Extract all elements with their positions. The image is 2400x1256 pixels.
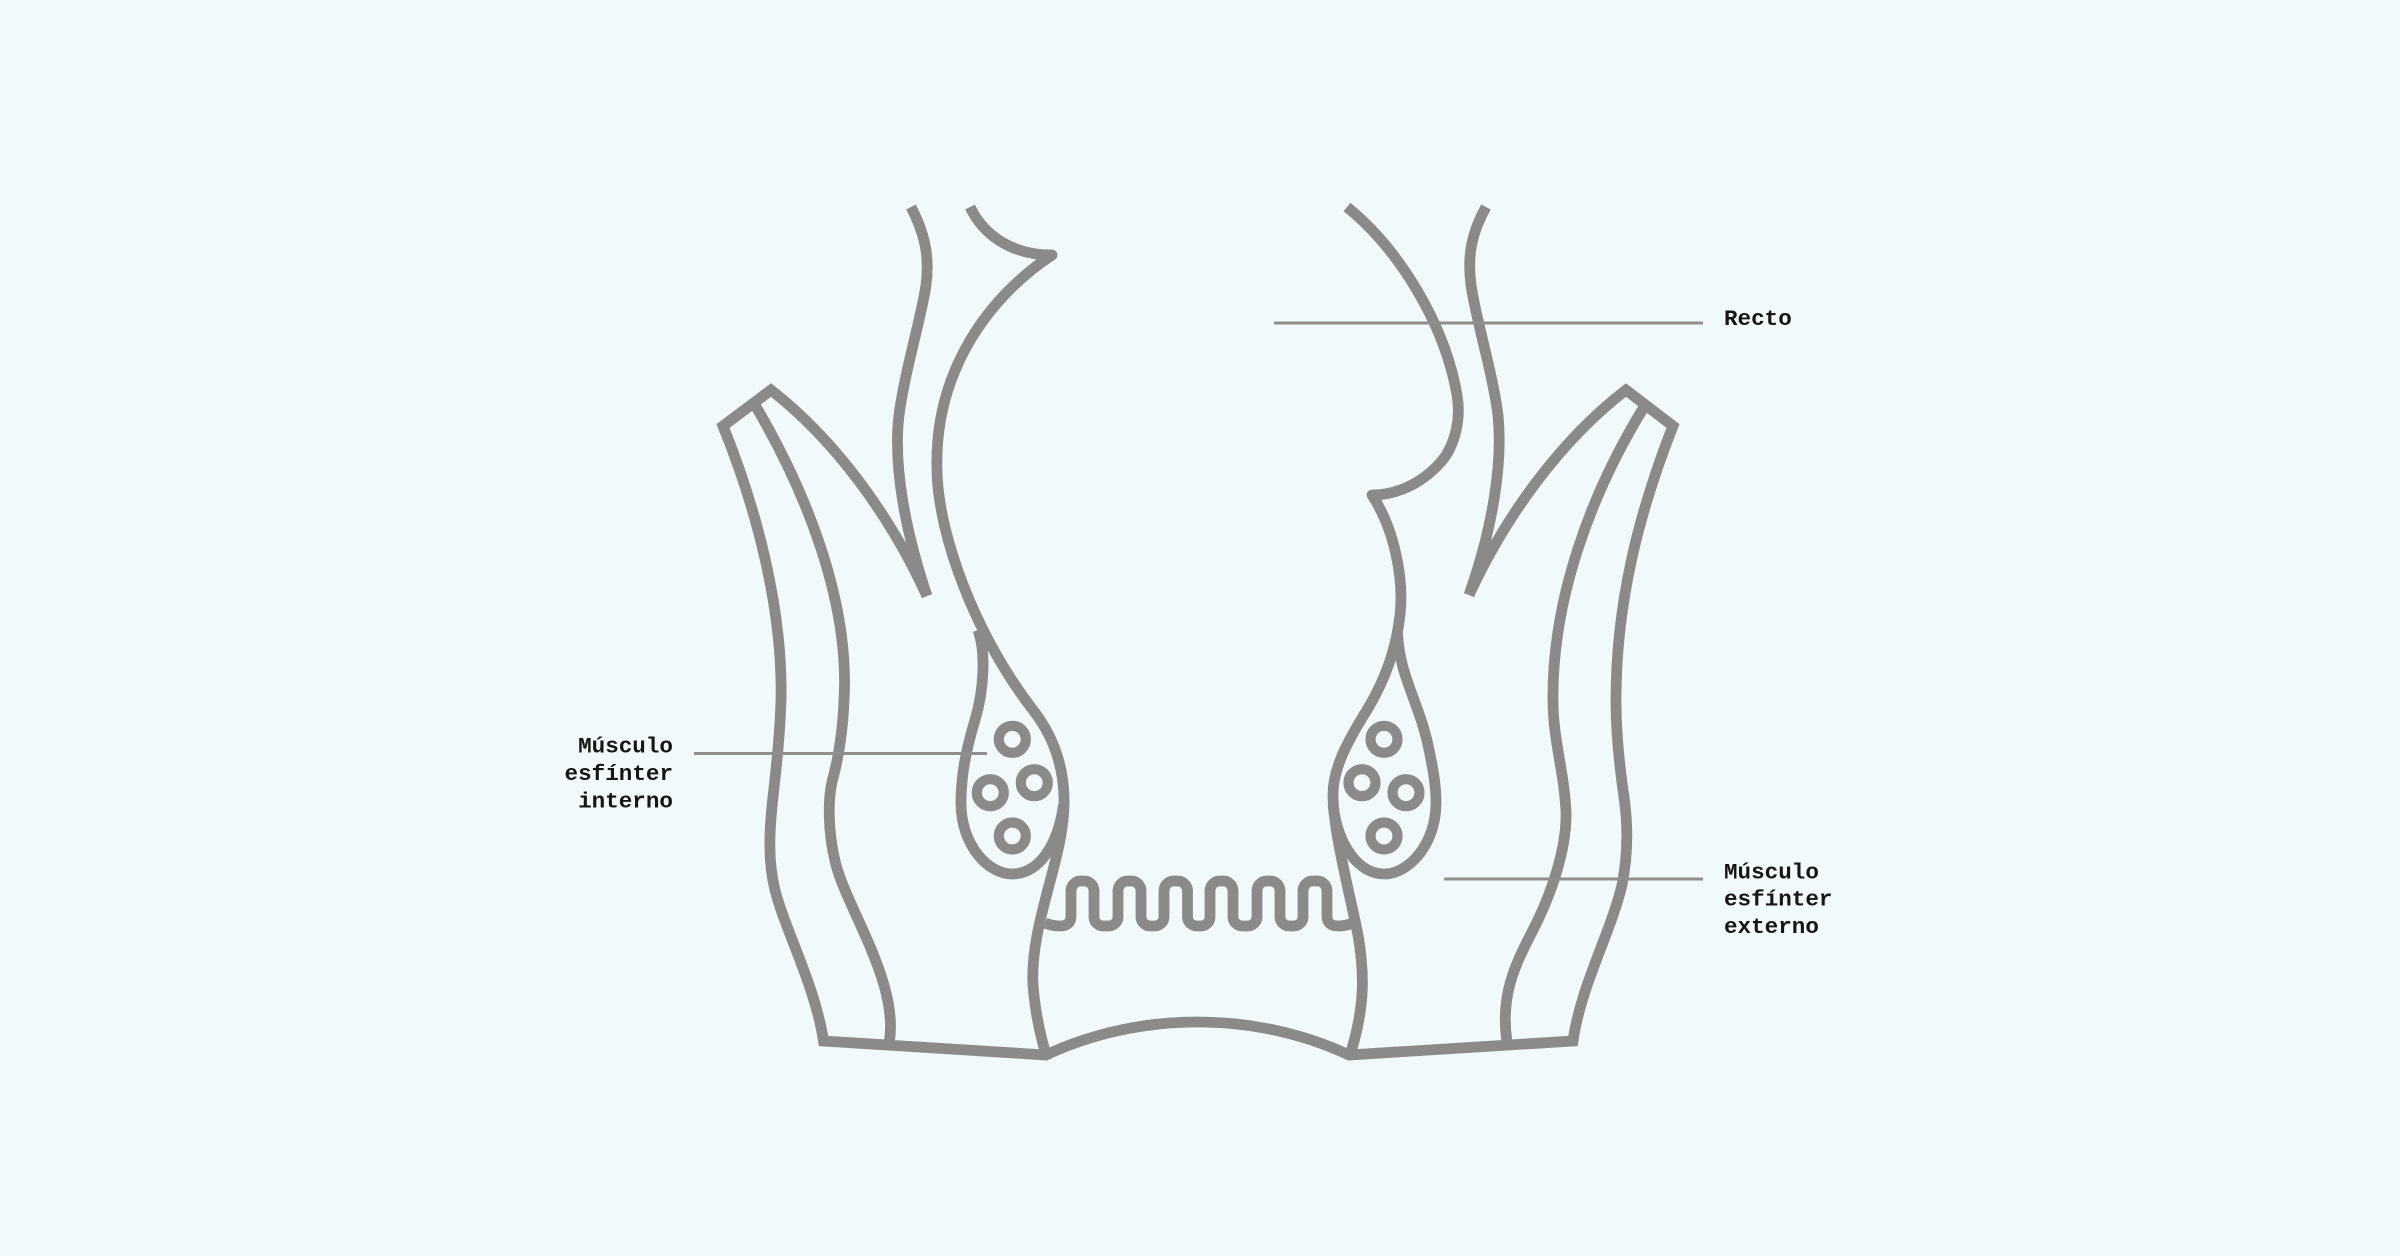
left muscle divider — [755, 405, 891, 1043]
label: músculo esfínter interno: interno — [578, 788, 673, 814]
label: músculo esfínter externo: esfínter — [1724, 886, 1832, 912]
left internal sphincter drop — [961, 630, 1064, 874]
left rectal outer wall — [897, 207, 927, 596]
left rectal inner wall — [937, 207, 1064, 1055]
right side structures — [1333, 207, 1644, 1055]
label line: recto — [1274, 322, 1703, 324]
right vessel circles — [1348, 726, 1420, 850]
label: músculo esfínter externo: Músculo — [1724, 860, 1819, 886]
label: músculo esfínter interno: esfínter — [565, 761, 673, 787]
right muscle divider — [1505, 407, 1644, 1042]
right rectal inner wall — [1333, 207, 1458, 1055]
label: músculo esfínter externo: externo — [1724, 914, 1819, 940]
label: músculo esfínter externo — [1724, 860, 1832, 940]
label line: músculo esfínter interno — [694, 752, 987, 755]
left side structures — [755, 207, 1064, 1055]
label: músculo esfínter interno: Músculo — [578, 734, 673, 760]
mucosal folds — [1045, 881, 1353, 926]
label: recto: Recto — [1724, 306, 1792, 332]
label line: músculo esfínter externo — [1444, 878, 1703, 880]
label: músculo esfínter interno — [565, 734, 673, 814]
right rectal outer wall — [1469, 207, 1499, 595]
outer muscle outline with anal canal base and arch — [723, 390, 1673, 1055]
right internal sphincter drop — [1333, 632, 1436, 874]
left vessel circles — [977, 726, 1048, 850]
